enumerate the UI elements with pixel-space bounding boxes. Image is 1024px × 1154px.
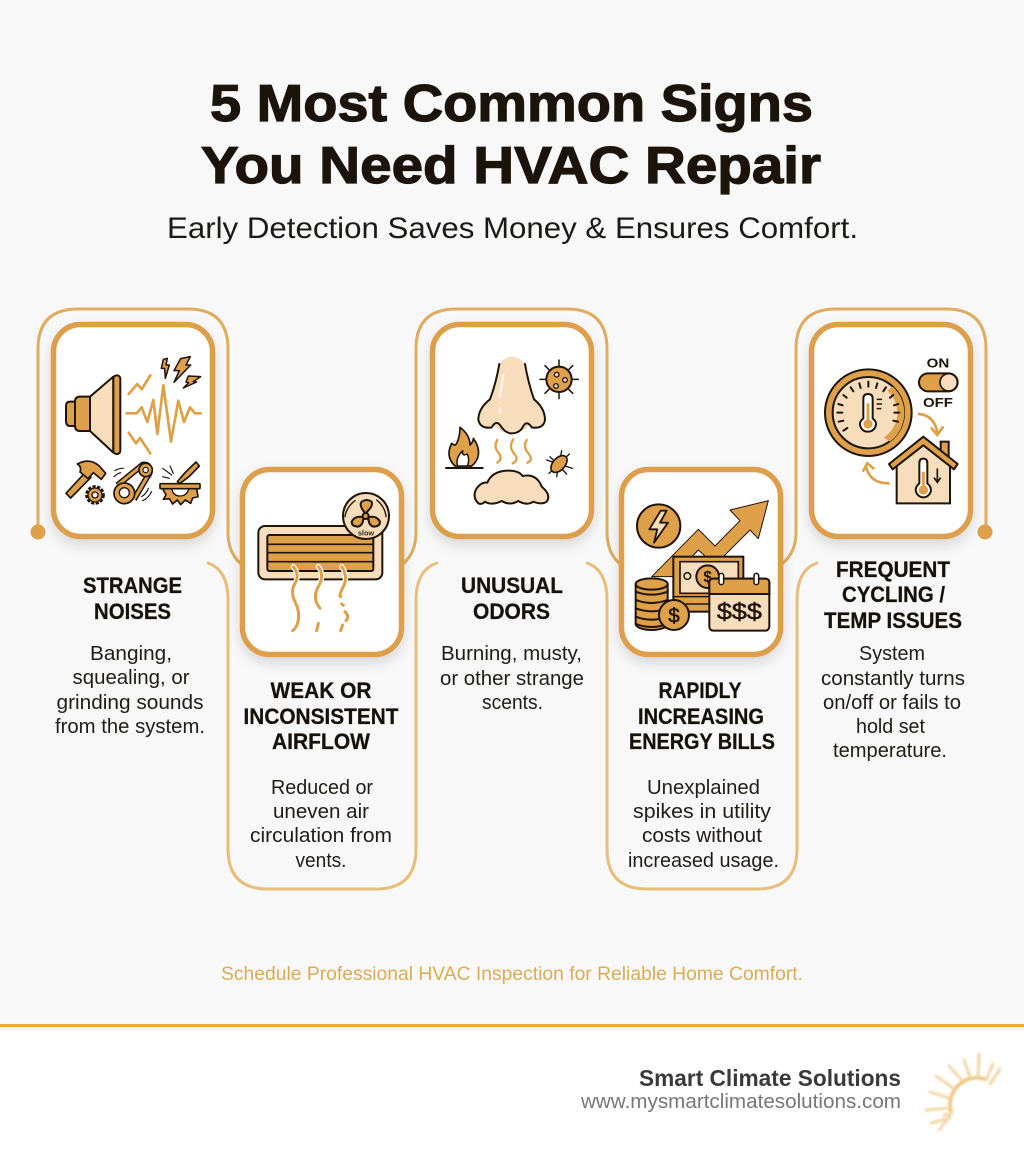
heading: frequent cycling: FREQUENT xyxy=(836,557,951,582)
website: www.mysmartclimatesolutions.com xyxy=(580,1091,901,1113)
card: unusual odors icon xyxy=(432,324,592,536)
card: energy bills icon: $$$ xyxy=(717,598,762,624)
text: energy bills xyxy=(628,776,779,872)
card: frequent cycling icon: ON xyxy=(927,356,949,371)
heading: frequent cycling: TEMP ISSUES xyxy=(824,608,962,633)
text: weak airflow: uneven air xyxy=(273,800,369,823)
saw and chisel xyxy=(163,489,198,505)
heading: weak airflow: AIRFLOW xyxy=(272,729,370,754)
text: frequent cycling: constantly turns xyxy=(821,667,965,690)
heading: weak airflow: WEAK OR xyxy=(270,678,372,703)
heading: energy bills: ENERGY BILLS xyxy=(629,729,775,754)
brand name: Smart Climate Solutions xyxy=(639,1065,901,1091)
card: frequent cycling icon xyxy=(812,324,970,536)
text: weak airflow: vents. xyxy=(296,849,346,872)
heading: frequent cycling xyxy=(824,557,962,633)
text: weak airflow: circulation from xyxy=(250,824,392,847)
title: 5 Most Common Signs xyxy=(210,75,813,133)
call to action: Schedule Professional HVAC Inspection for Reliable Home Comfort. xyxy=(221,964,803,985)
subtitle: Early Detection Saves Money & Ensures Comfort. xyxy=(167,212,858,245)
text: energy bills: increased usage. xyxy=(628,849,779,872)
heading: energy bills: INCREASING xyxy=(638,704,764,729)
heading: weak airflow: INCONSISTENT xyxy=(244,704,399,729)
heading: weak airflow xyxy=(244,678,399,754)
text: frequent cycling: hold set xyxy=(856,715,925,738)
card: weak airflow icon xyxy=(242,470,402,654)
text: unusual odors: Burning, musty, xyxy=(441,642,582,665)
text: strange noises: squealing, or xyxy=(72,666,190,689)
heading: energy bills: RAPIDLY xyxy=(658,678,742,703)
text: strange noises xyxy=(55,642,205,738)
heading: energy bills xyxy=(629,678,775,754)
text: strange noises: Banging, xyxy=(90,642,172,665)
text: energy bills: costs without xyxy=(642,824,762,847)
text: frequent cycling: System xyxy=(859,642,925,665)
connector line xyxy=(30,309,992,889)
heading: strange noises xyxy=(83,573,182,624)
text: weak airflow xyxy=(250,776,392,872)
text: weak airflow: Reduced or xyxy=(271,776,373,799)
card: strange noises icon xyxy=(54,324,212,536)
text: energy bills: Unexplained xyxy=(647,776,760,799)
heading: unusual odors xyxy=(461,573,563,624)
heading: unusual odors: UNUSUAL xyxy=(461,573,563,598)
text: strange noises: grinding sounds xyxy=(56,691,204,714)
heading: strange noises: STRANGE xyxy=(83,573,182,598)
card: energy bills icon xyxy=(622,470,780,654)
heading: frequent cycling: CYCLING / xyxy=(842,582,945,607)
text: unusual odors: scents. xyxy=(482,691,543,714)
footer band xyxy=(0,1024,1024,1154)
title: You Need HVAC Repair xyxy=(201,137,821,195)
hammer xyxy=(66,473,91,498)
card: frequent cycling icon: OFF xyxy=(923,395,953,410)
heading: unusual odors: ODORS xyxy=(473,599,550,624)
heading: strange noises: NOISES xyxy=(94,599,171,624)
text: frequent cycling: on/off or fails to xyxy=(823,691,961,714)
text: unusual odors: or other strange xyxy=(440,667,584,690)
belt xyxy=(117,464,150,499)
text: frequent cycling xyxy=(821,642,965,762)
card: weak airflow icon: slow xyxy=(358,528,374,537)
text: strange noises: from the system. xyxy=(55,715,205,738)
card: energy bills icon: $ xyxy=(703,569,712,586)
text: energy bills: spikes in utility xyxy=(633,800,772,823)
title xyxy=(201,75,821,195)
text: unusual odors xyxy=(440,642,584,714)
text: frequent cycling: temperature. xyxy=(833,739,947,762)
icon: sun logo xyxy=(926,1054,1000,1130)
card: energy bills icon: $ xyxy=(668,605,680,628)
